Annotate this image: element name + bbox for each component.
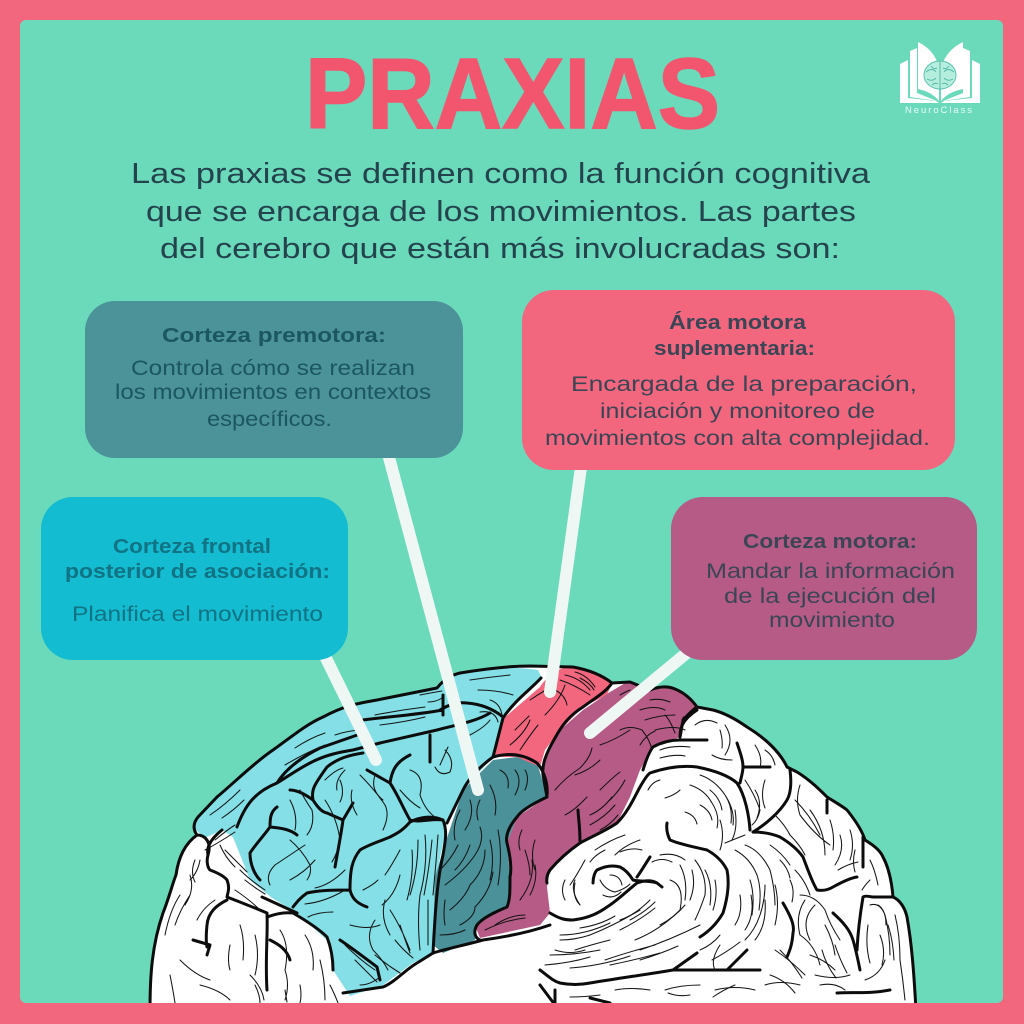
panel: area motora suplementaria [522, 290, 955, 470]
intro text block: del cerebro que están más involucradas son: [160, 233, 840, 265]
region: frontal posterior association cortex [194, 668, 541, 996]
region: supplementary motor area [493, 667, 612, 767]
pointer: premotor [387, 450, 478, 790]
panel: area motora suplementaria: Encargada de la preparación, [571, 372, 917, 396]
panel: corteza frontal posterior de asociacion: Planifica el movimiento [72, 602, 323, 626]
panel: corteza motora: de la ejecución del [724, 584, 936, 608]
panel: corteza frontal posterior de asociacion: posterior de asociación: [65, 560, 330, 583]
intro text block: que se encarga de los movimientos. Las partes [146, 196, 856, 228]
icon: NeuroClass book and brain logo [900, 42, 980, 116]
panel: area motora suplementaria: iniciación y monitoreo de [600, 399, 875, 423]
panel: area motora suplementaria: suplementaria: [654, 337, 815, 360]
panel: corteza premotora: específicos. [207, 407, 332, 431]
panel: corteza motora: Corteza motora: [743, 530, 917, 553]
panel: corteza frontal posterior de asociacion: Corteza frontal [113, 535, 271, 558]
panel: corteza premotora: Controla cómo se realizan [131, 356, 415, 380]
icon: NeuroClass book and brain logo: NeuroClass [905, 105, 972, 116]
pointer: motor cortex [590, 642, 700, 733]
pointer: frontal association [322, 650, 376, 760]
fine hatching lines [165, 672, 905, 1003]
region: motor cortex [475, 682, 697, 938]
panel: corteza motora: Mandar la información [706, 559, 955, 583]
illustration: brain with highlighted regions [150, 666, 916, 1010]
panel: corteza motora [671, 497, 977, 660]
panel: corteza premotora: los movimientos en contextos [115, 380, 431, 404]
title: PRAXIAS [305, 38, 720, 150]
panel: corteza frontal posterior de asociacion [41, 497, 348, 660]
panel: area motora suplementaria: Área motora [669, 311, 807, 334]
brain silhouette [150, 666, 916, 1010]
outline and sulci [150, 666, 916, 1010]
intro text block: Las praxias se definen como la función cognitiva [131, 158, 870, 190]
panel: area motora suplementaria: movimientos con alta complejidad. [545, 426, 930, 450]
intro text block [131, 158, 870, 265]
panel: corteza premotora: Corteza premotora: [162, 324, 386, 347]
panel: corteza premotora [85, 301, 463, 458]
region: premotor cortex [433, 757, 547, 953]
pointer: supplementary motor area [550, 460, 582, 692]
panel: corteza motora: movimiento [769, 608, 895, 632]
